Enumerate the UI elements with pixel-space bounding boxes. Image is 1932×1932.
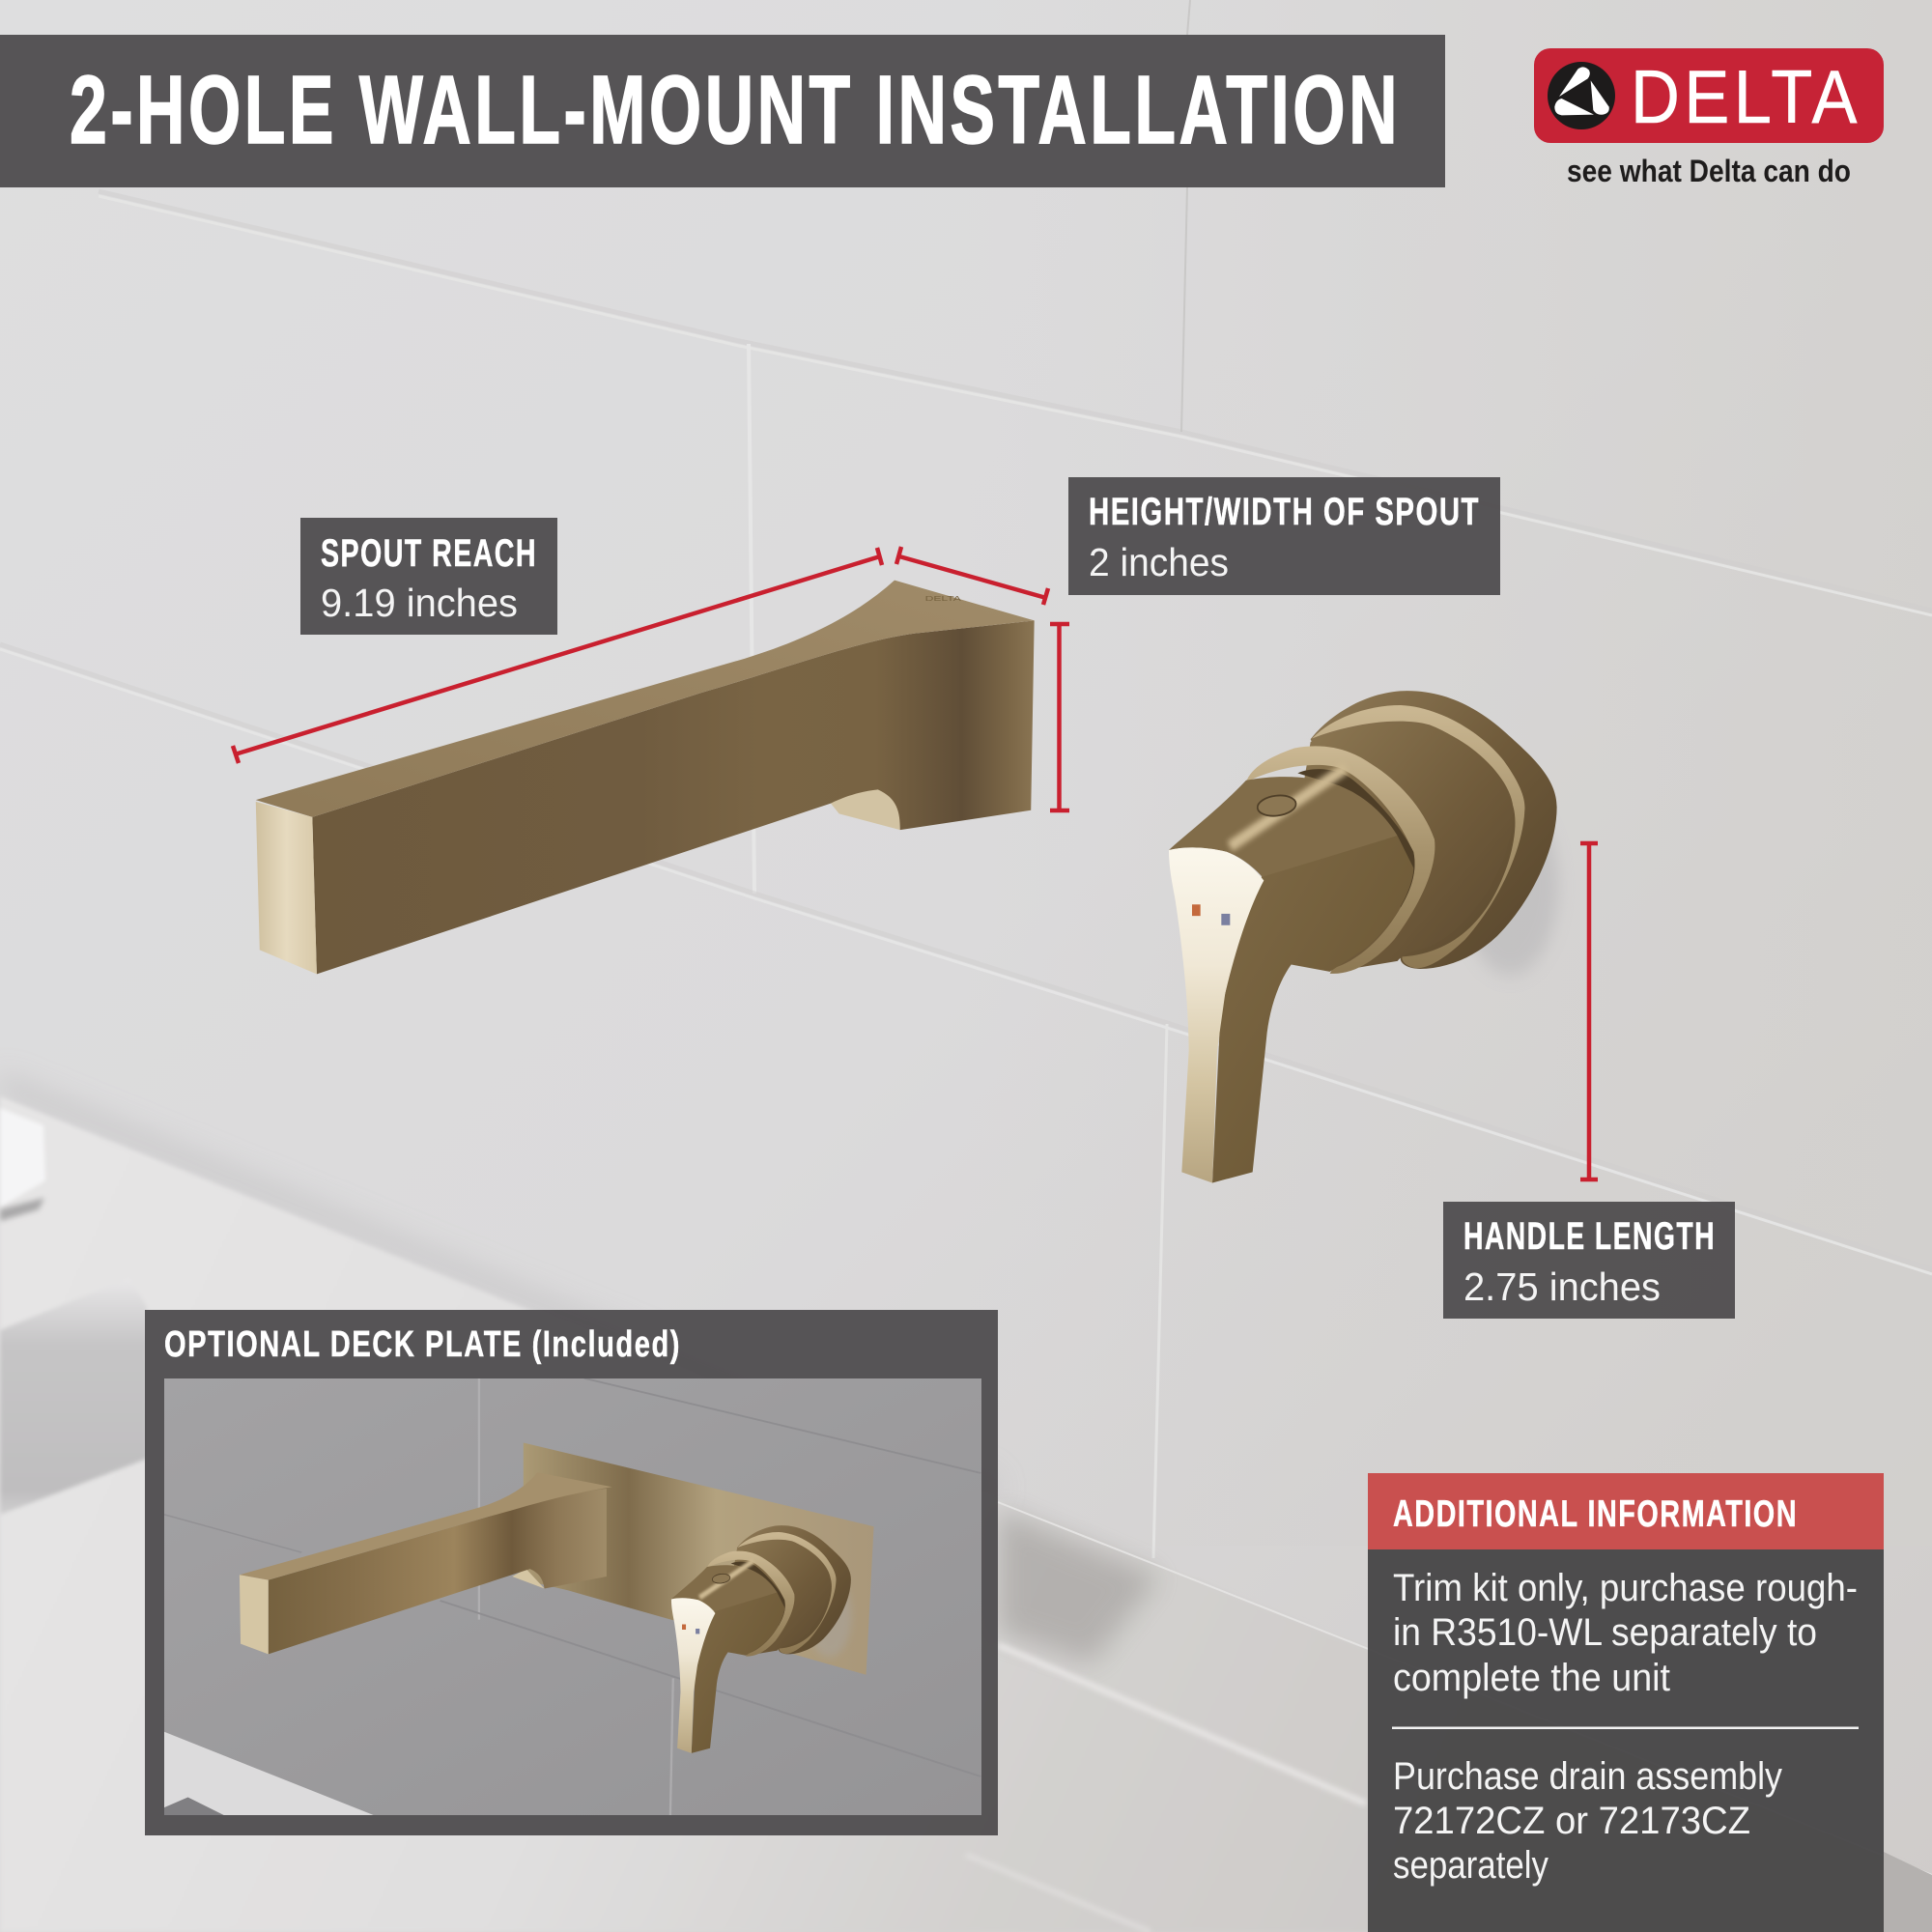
- hot indicator: [1192, 904, 1201, 916]
- info text: trim kit note: Trim kit only, purchase rough-: [1393, 1567, 1858, 1609]
- inset deck plate: [524, 1443, 874, 1675]
- title text: 2-HOLE WALL-MOUNT INSTALLATION: [70, 56, 1401, 164]
- info text: trim kit note: in R3510-WL separately to: [1393, 1611, 1817, 1654]
- handle back plate: [1311, 691, 1557, 969]
- panel: optional deck plate: [145, 1310, 998, 1835]
- callout: height and width of spout: HEIGHT/WIDTH OF SPOUT: [1089, 491, 1480, 533]
- info text: drain assembly note: Purchase drain assembly: [1393, 1755, 1782, 1798]
- countertop and ledge: [0, 1096, 1932, 1932]
- inset sink corner: [164, 1732, 374, 1815]
- handle body: [1301, 724, 1514, 972]
- spout main face: [312, 620, 1035, 974]
- spout product image: [256, 581, 1035, 974]
- info body: [1368, 1549, 1884, 1932]
- info text: drain assembly note: 72172CZ or 72173CZ: [1393, 1800, 1750, 1842]
- info text: drain assembly note: separately: [1393, 1844, 1548, 1887]
- tagline: see what Delta can do: [1567, 154, 1851, 188]
- sink basin: [0, 1278, 147, 1515]
- callout: handle length: HANDLE LENGTH: [1463, 1215, 1716, 1258]
- icon: Delta trilobe mark: [1548, 62, 1615, 129]
- inset spout notch: [512, 1569, 545, 1589]
- inset handle: [671, 1525, 852, 1753]
- inset photo: [164, 1378, 981, 1815]
- spout engraved mark: DELTA: [925, 595, 962, 603]
- spout end face: [256, 802, 317, 974]
- measure: spout width line: [896, 547, 1048, 605]
- callout: handle length: [1443, 1202, 1735, 1319]
- spout notch: [831, 789, 900, 830]
- handle button: [1257, 793, 1297, 818]
- measure: spout reach line: [233, 548, 882, 763]
- measure: spout height line: [1050, 624, 1069, 810]
- cold indicator: [1221, 914, 1230, 925]
- info heading bar: [1368, 1473, 1884, 1549]
- panel: additional information: [1368, 1473, 1884, 1932]
- handle front face: [1169, 847, 1264, 1182]
- title banner: [0, 35, 1445, 187]
- inset tile joints: [164, 1378, 980, 1815]
- measure: handle length line: [1580, 843, 1598, 1179]
- handle inner ring: [1246, 746, 1435, 974]
- inset spout: [269, 1489, 607, 1654]
- handle outer ring: [1312, 705, 1524, 968]
- info text: drain assembly note: [1393, 1755, 1782, 1887]
- Delta logo: [1534, 48, 1884, 188]
- handle product image: [1169, 691, 1558, 1182]
- handle wall shadow: [1462, 796, 1558, 976]
- callout: height and width of spout: [1068, 477, 1500, 595]
- callout: spout reach: SPOUT REACH: [321, 532, 537, 575]
- shadow at wall base: [0, 1072, 998, 1502]
- soap dish: [0, 1108, 45, 1208]
- info text: trim kit note: [1393, 1567, 1858, 1699]
- callout: spout reach: [300, 518, 557, 635]
- spout top face: [256, 581, 1035, 817]
- info text: trim kit note: complete the unit: [1393, 1657, 1670, 1699]
- panel heading: OPTIONAL DECK PLATE (Included): [164, 1324, 681, 1365]
- callout: spout reach: 9.19 inches: [321, 581, 518, 625]
- handle lever: [1212, 836, 1413, 1182]
- handle lever top face: [1169, 777, 1398, 877]
- callout: height and width of spout: 2 inches: [1089, 540, 1229, 584]
- panel: additional information: ADDITIONAL INFORMATION: [1393, 1493, 1798, 1535]
- callout: handle length: 2.75 inches: [1463, 1264, 1661, 1309]
- logo wordmark: DELTA: [1631, 54, 1861, 139]
